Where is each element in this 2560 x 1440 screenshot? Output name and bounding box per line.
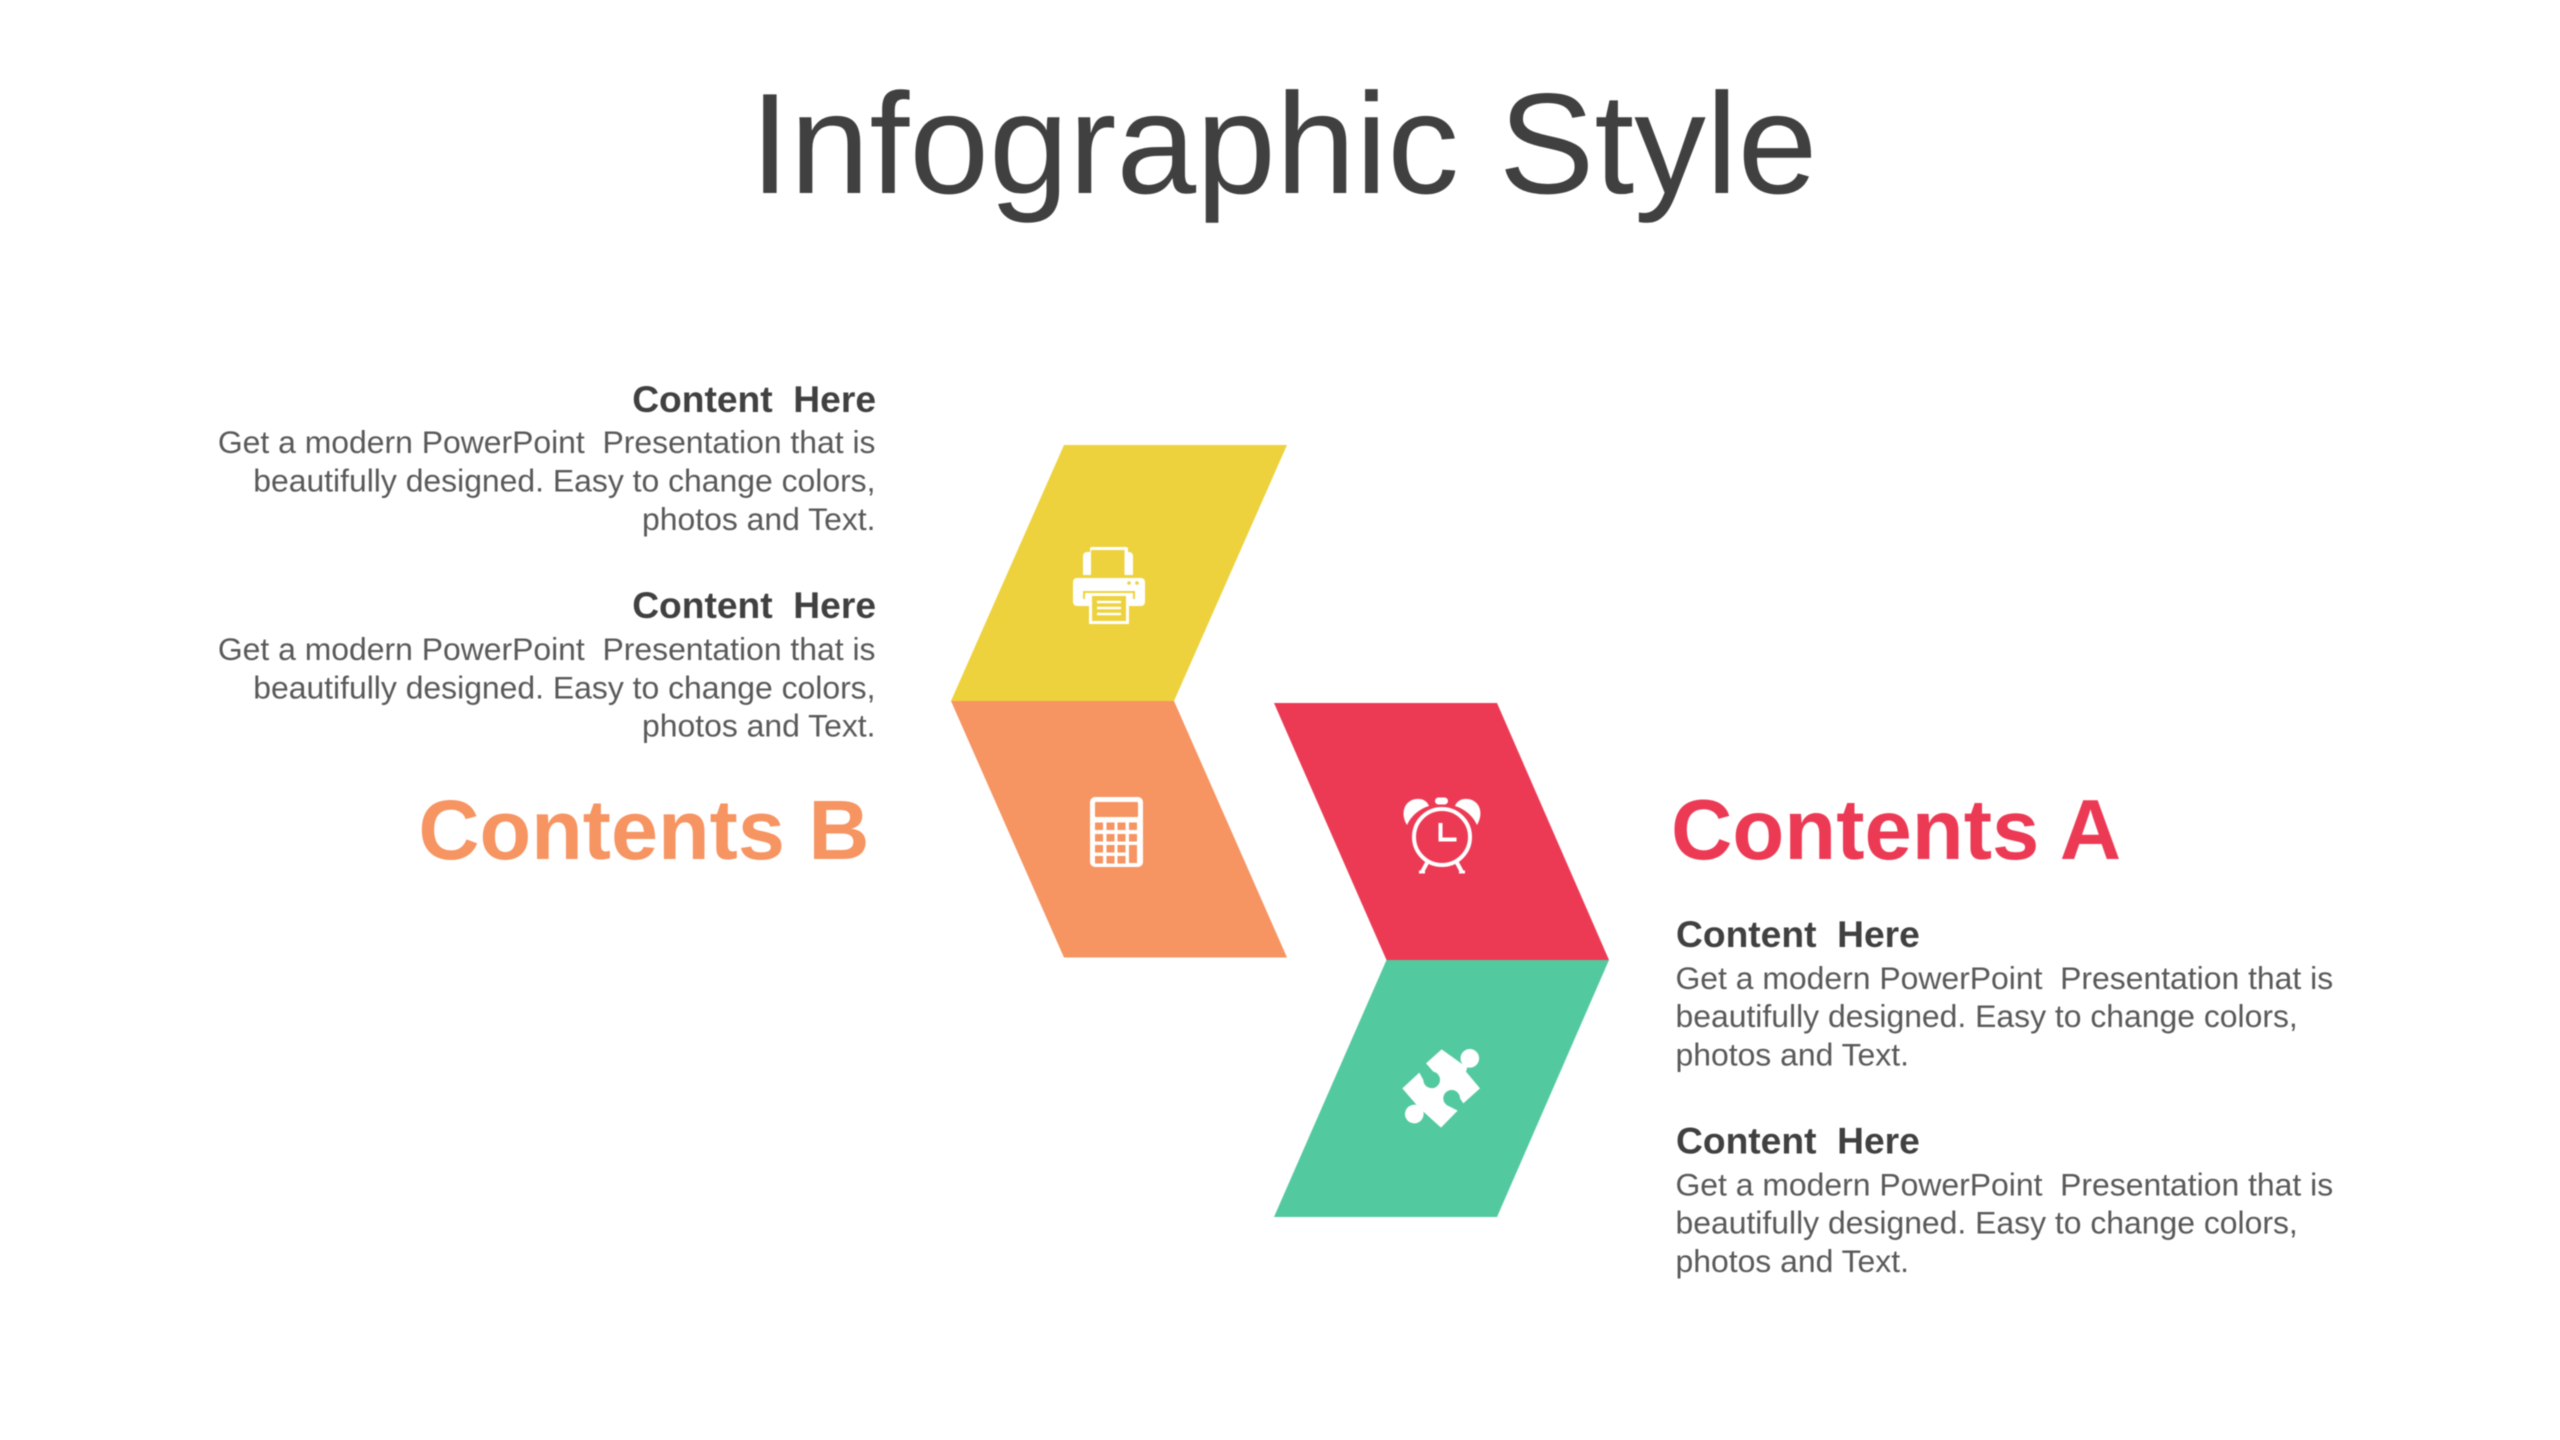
- text block: B content 1: [218, 378, 876, 537]
- title: Infographic Style: [750, 64, 1817, 224]
- text block: A content 2: [1676, 1120, 2333, 1279]
- text block: A content 2: Content Here: [1676, 1120, 1920, 1162]
- icon: alarm clock: [1404, 798, 1480, 872]
- text block: A content 1: beautifully designed. Easy to change colors,: [1676, 998, 2298, 1034]
- text block: A content 2: Get a modern PowerPoint Presentation that is: [1676, 1166, 2333, 1202]
- panel: orange chevron segment: [951, 701, 1287, 958]
- text block: B content 2: photos and Text.: [642, 708, 876, 744]
- text block: B content 1: Get a modern PowerPoint Presentation that is: [218, 424, 876, 460]
- text block: A content 1: Get a modern PowerPoint Presentation that is: [1676, 960, 2333, 996]
- icon: printer: [1073, 547, 1145, 622]
- panel: yellow chevron segment: [951, 445, 1287, 701]
- heading: Contents B: Contents B: [418, 782, 870, 877]
- text block: A content 1: Content Here: [1676, 913, 1920, 955]
- text block: A content 1: photos and Text.: [1676, 1036, 1909, 1072]
- text block: A content 1: [1676, 913, 2333, 1072]
- text block: B content 2: beautifully designed. Easy to change colors,: [253, 670, 876, 706]
- text block: B content 1: Content Here: [632, 378, 876, 420]
- text block: A content 2: photos and Text.: [1676, 1243, 1909, 1279]
- icon: puzzle piece: [1402, 1049, 1480, 1128]
- text block: A content 2: beautifully designed. Easy to change colors,: [1676, 1204, 2298, 1240]
- heading: Contents A: Contents A: [1671, 783, 2121, 878]
- text block: B content 1: beautifully designed. Easy to change colors,: [253, 462, 876, 498]
- text block: B content 2: [218, 584, 876, 744]
- panel: red chevron segment: [1274, 703, 1609, 960]
- icon: calculator: [1090, 797, 1143, 867]
- text block: B content 2: Content Here: [632, 584, 876, 626]
- text block: B content 2: Get a modern PowerPoint Presentation that is: [218, 631, 876, 667]
- text block: B content 1: photos and Text.: [642, 501, 876, 537]
- panel: green chevron segment: [1274, 960, 1609, 1217]
